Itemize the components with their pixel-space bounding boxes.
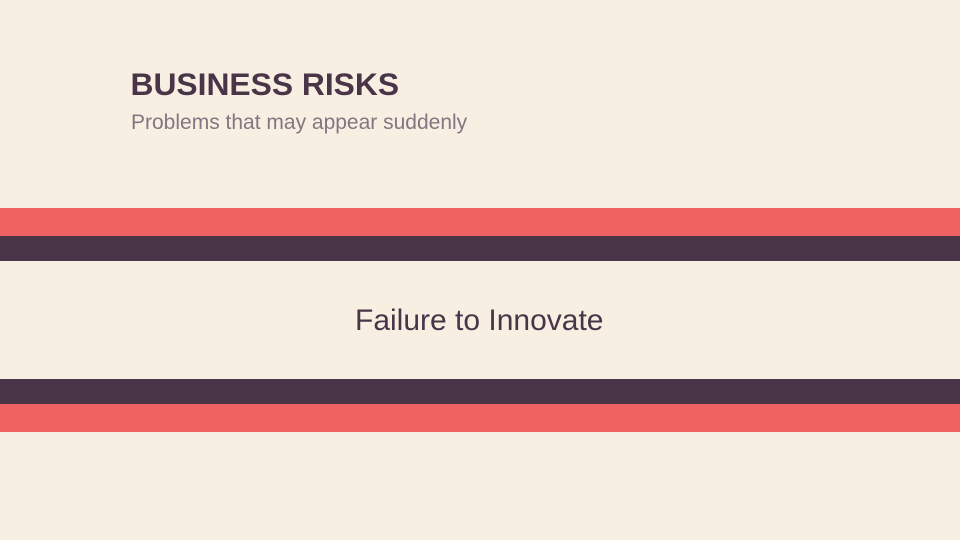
bottom band: dark stripe (0, 379, 960, 404)
title: BUSINESS RISKS (130, 66, 399, 102)
subtitle: Problems that may appear suddenly (131, 111, 467, 134)
bottom band: red stripe (0, 404, 960, 432)
top band: dark stripe (0, 236, 960, 261)
top band: red stripe (0, 208, 960, 236)
central risk label: Failure to Innovate (355, 304, 603, 337)
